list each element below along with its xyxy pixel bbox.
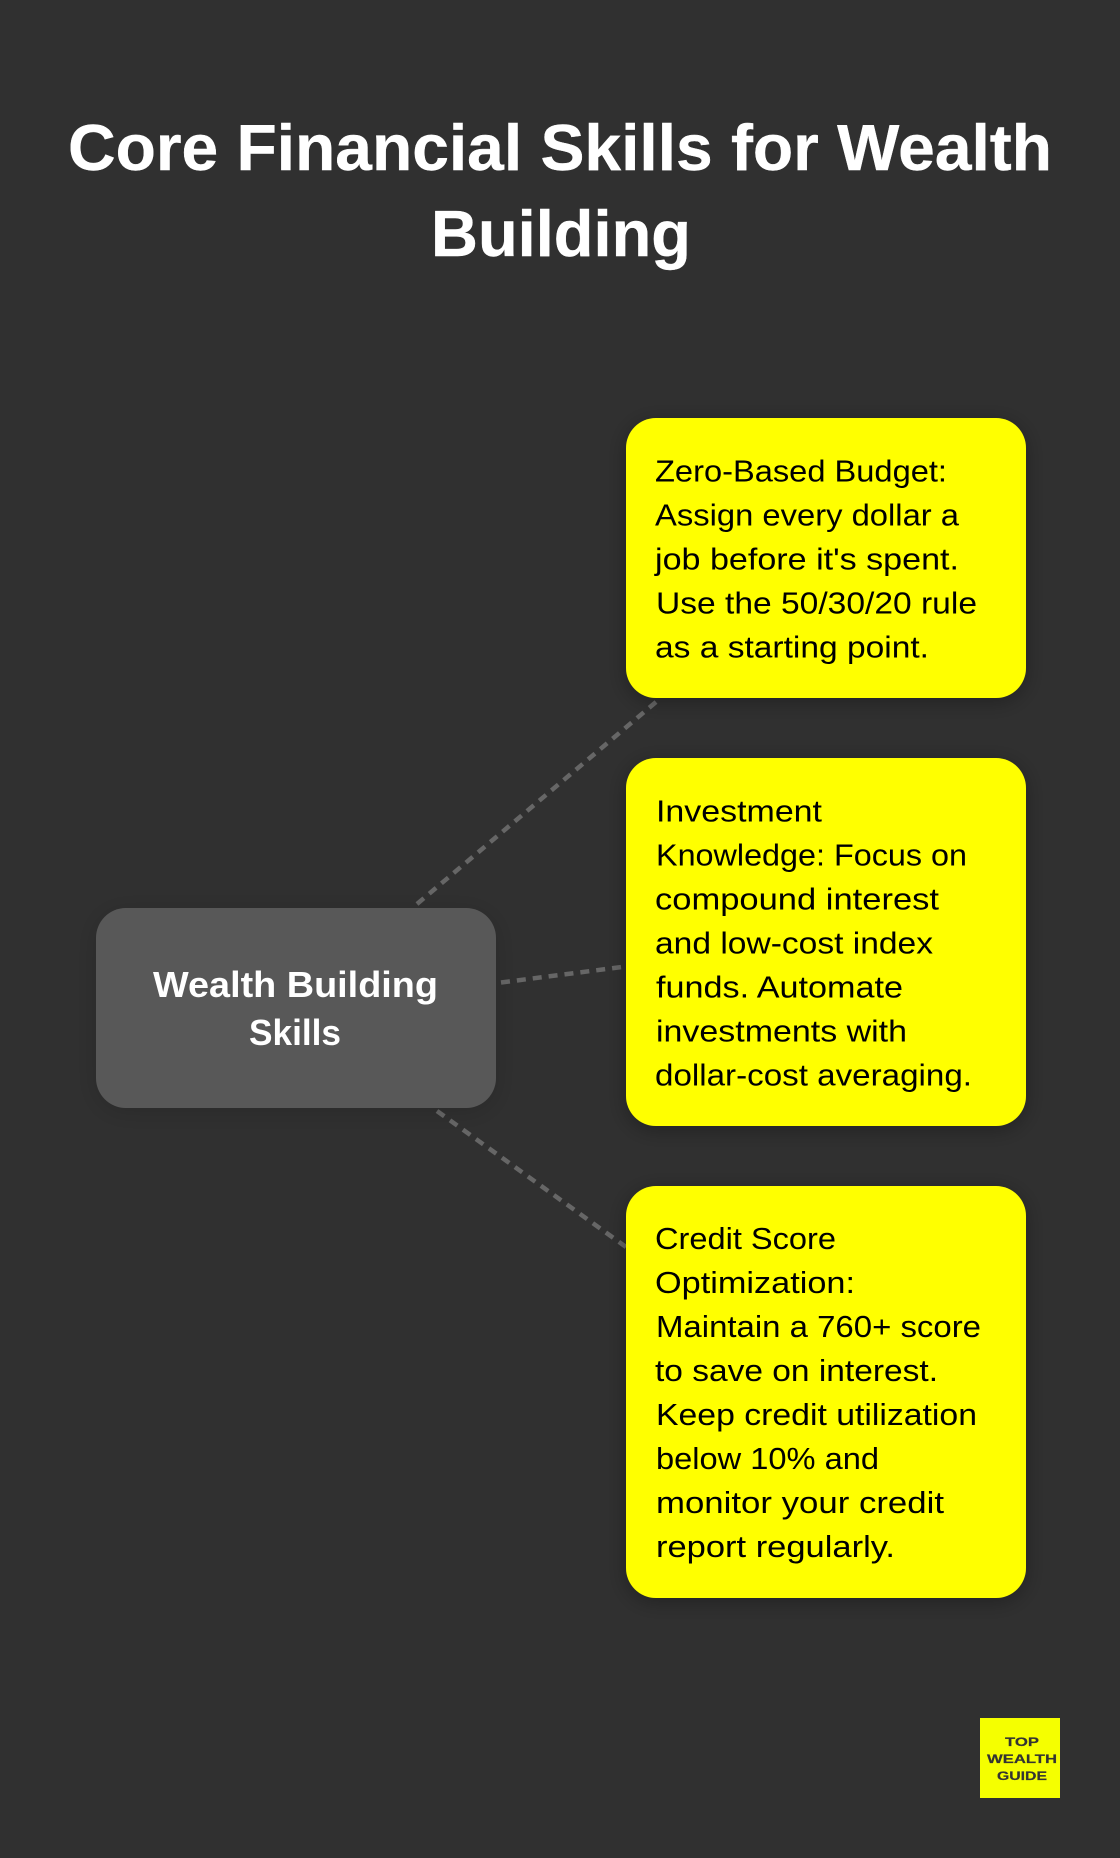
- card text: credit score optimization: Credit Score: [655, 1222, 836, 1256]
- logo text: [987, 1735, 1057, 1783]
- card text: zero-based budget: Assign every dollar a: [655, 498, 959, 532]
- card text: credit score optimization: [655, 1222, 981, 1564]
- card text: investment knowledge: compound interest: [655, 882, 940, 916]
- card text: investment knowledge: funds. Automate: [656, 970, 903, 1004]
- card text: zero-based budget: as a starting point.: [655, 630, 929, 664]
- panel: investment knowledge: [626, 758, 1026, 1126]
- card text: investment knowledge: [655, 794, 972, 1092]
- title: [68, 111, 1052, 270]
- panel: credit score optimization: [626, 1186, 1026, 1598]
- card text: zero-based budget: Zero-Based Budget:: [655, 454, 947, 488]
- connector: hub to zero-based budget: [417, 702, 656, 904]
- card text: zero-based budget: [654, 454, 977, 664]
- card text: credit score optimization: to save on interest.: [655, 1354, 938, 1388]
- card text: credit score optimization: Optimization:: [655, 1266, 855, 1300]
- logo text: TOP: [1005, 1735, 1039, 1749]
- card text: zero-based budget: job before it's spent.: [654, 542, 959, 576]
- card text: credit score optimization: monitor your credit: [656, 1486, 945, 1520]
- hub label: [153, 964, 438, 1053]
- card text: investment knowledge: Knowledge: Focus on: [656, 838, 967, 872]
- hub label: Skills: [249, 1012, 341, 1053]
- card text: credit score optimization: below 10% and: [656, 1442, 879, 1476]
- card text: investment knowledge: and low-cost index: [655, 926, 933, 960]
- logo text: WEALTH: [987, 1752, 1057, 1766]
- card text: investment knowledge: Investment: [656, 794, 823, 828]
- card text: credit score optimization: Keep credit utilization: [656, 1398, 977, 1432]
- card text: investment knowledge: investments with: [656, 1014, 907, 1048]
- logo text: GUIDE: [997, 1769, 1047, 1783]
- connector: hub to credit score optimization: [437, 1111, 626, 1247]
- panel: wealth building skills hub: [96, 908, 496, 1108]
- logo: top wealth guide: [980, 1718, 1060, 1798]
- card text: credit score optimization: Maintain a 760+ score: [656, 1310, 981, 1344]
- connector: hub to investment knowledge: [501, 967, 622, 982]
- card text: investment knowledge: dollar-cost averaging.: [655, 1058, 972, 1092]
- panel: zero-based budget: [626, 418, 1026, 698]
- card text: zero-based budget: Use the 50/30/20 rule: [656, 586, 977, 620]
- title: Core Financial Skills for Wealth: [68, 111, 1052, 184]
- title: Building: [431, 197, 691, 270]
- hub label: Wealth Building: [153, 964, 438, 1005]
- card text: credit score optimization: report regularly.: [656, 1530, 895, 1564]
